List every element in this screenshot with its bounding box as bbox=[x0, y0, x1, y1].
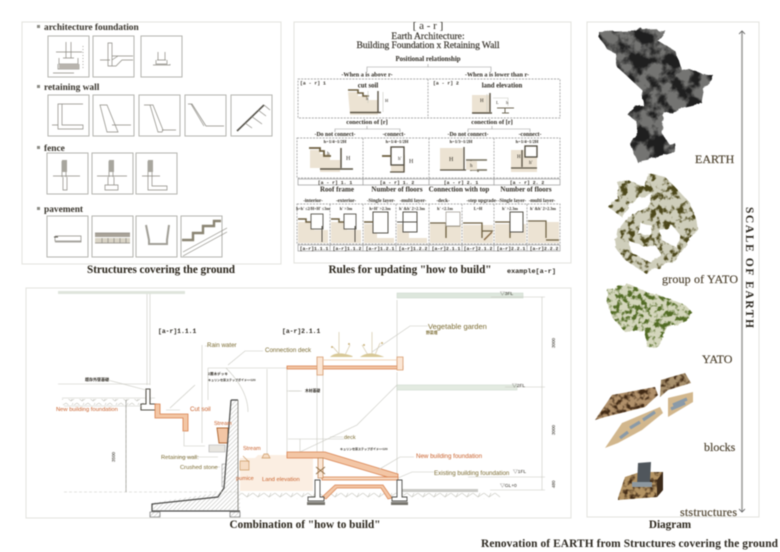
drawing: ground hatch bbox=[240, 493, 500, 499]
labels: connect options: h=1/4~1/2H bbox=[516, 139, 539, 144]
diagram: 1.1: h bbox=[327, 152, 330, 157]
box: level three cases bbox=[296, 204, 560, 244]
level markers and dimensions: ▽3FL bbox=[500, 291, 513, 297]
diagram: cut soil bbox=[348, 90, 389, 115]
callouts: Crushed stone bbox=[180, 465, 218, 471]
thumbnails: retaining wall bbox=[48, 95, 272, 136]
thumbnails: architecture foundation bbox=[48, 36, 182, 77]
callouts: New building foundation bbox=[56, 407, 118, 413]
callouts: deck bbox=[344, 435, 356, 441]
diagram: 2.2: h' bbox=[529, 161, 532, 166]
labels: connect options: -connect- bbox=[383, 132, 405, 138]
level markers and dimensions: 3000 bbox=[551, 424, 556, 435]
callouts: キュリンセ床ステップボイド<=120 bbox=[340, 446, 388, 451]
condition labels: h' >2.3m bbox=[502, 206, 518, 211]
heading: earth architecture: Earth Architecture: bbox=[391, 31, 465, 42]
labels: third level options: -multi layer- bbox=[400, 199, 427, 204]
strip: level three labels bbox=[298, 245, 560, 252]
condition labels: h+H' >2.3m bbox=[369, 206, 391, 211]
diagram: land elevation: L bbox=[496, 100, 499, 105]
box: level one cases bbox=[298, 79, 560, 118]
condition labels bbox=[296, 206, 556, 211]
strip: level two labels bbox=[298, 179, 560, 186]
image: earth map bbox=[599, 30, 713, 163]
callouts: Rain water bbox=[207, 342, 237, 349]
heading: number of floors: Number of floors bbox=[371, 186, 423, 194]
diagram: 2.2: H bbox=[517, 155, 521, 160]
callouts: Connection deck bbox=[265, 347, 312, 354]
heading: earth architecture bbox=[356, 31, 500, 51]
diagram: 1.2: h' bbox=[398, 157, 402, 162]
diagram: 2.2 bbox=[511, 146, 537, 172]
image: group of yato bbox=[608, 173, 698, 273]
panel: combination of how to build bbox=[26, 288, 571, 518]
callouts: Cut soil bbox=[190, 406, 211, 413]
heading: connection with top: Connection with top bbox=[429, 186, 489, 194]
diagram: land elevation: H bbox=[480, 99, 484, 104]
label: group of YATO: group of YATO bbox=[662, 272, 738, 286]
diagram: 2.1: h bbox=[470, 164, 473, 169]
diagram: 1.2: H bbox=[409, 159, 414, 165]
condition labels: h' <2.1m bbox=[437, 206, 453, 211]
labels: connect options: h=1/4~1/2H bbox=[386, 139, 409, 144]
heading: pavement: pavement bbox=[44, 205, 84, 215]
diagram: 2.1 bbox=[440, 147, 487, 172]
labels: connect options: h=1/3~1/2H bbox=[450, 139, 473, 144]
strip: level three labels: [a-r]1.1.1 bbox=[300, 246, 329, 252]
callouts: 2層木デッキ bbox=[208, 371, 228, 376]
drawing: retaining wall bbox=[150, 400, 240, 517]
drawing: footings bbox=[307, 480, 408, 505]
label: EARTH: EARTH bbox=[695, 152, 735, 166]
level markers and dimensions: ▽1FL bbox=[513, 469, 526, 475]
image: blocks bbox=[595, 373, 693, 448]
diagrams: interior and exterior bbox=[298, 214, 361, 243]
diagram: cut soil: h bbox=[366, 96, 369, 101]
strip: level three labels: [a-r]1.2.2 bbox=[399, 246, 428, 252]
labels: third level options bbox=[303, 199, 556, 204]
level markers and dimensions: 480 bbox=[551, 480, 556, 488]
labels: third level options: -exterior- bbox=[336, 199, 356, 204]
diagram: 1.1 bbox=[309, 148, 353, 172]
diagram: 1.1: H bbox=[346, 156, 351, 162]
labels: connect options: -connect- bbox=[519, 132, 541, 138]
label: ststructures: ststructures bbox=[680, 505, 737, 519]
drawing: left building bbox=[58, 291, 185, 410]
dimension: wall height: 3500 bbox=[111, 451, 116, 462]
level markers and dimensions bbox=[468, 291, 556, 490]
labels: connect options: -Do not connect- bbox=[315, 132, 356, 138]
strip: level three labels: [a-r]2.2.1 bbox=[497, 246, 526, 252]
strip: level three labels: [a-r]2.1.2 bbox=[464, 246, 493, 252]
condition labels: h' &h' 2>2.3m bbox=[399, 206, 425, 211]
label: YATO: YATO bbox=[702, 352, 733, 366]
heading: retaining wall: retaining wall bbox=[44, 83, 100, 93]
drawing: new building foundation deck and ramp bbox=[287, 452, 398, 499]
strip: level three labels: [a-r]1.2.1 bbox=[366, 246, 395, 252]
labels: third level options: -step upgrade- bbox=[467, 199, 498, 204]
label: [a-r]2: [a - r] 2 bbox=[433, 80, 459, 86]
label: example: example[a-r] bbox=[507, 268, 556, 276]
thumbnails: pavement bbox=[47, 216, 227, 257]
label: scale of earth: SCALE OF EARTH bbox=[743, 207, 755, 328]
title: combination of how to build: Combination of "how to build" bbox=[230, 519, 380, 531]
heading: cut soil: cut soil bbox=[358, 82, 378, 90]
heading: [a-r]: [ a - r ] bbox=[413, 20, 443, 32]
drawing: orange details near wall bbox=[240, 454, 270, 470]
callouts: 木材基礎 bbox=[305, 388, 320, 393]
strip: level three labels: [a-r]1.1.2 bbox=[333, 246, 362, 252]
title: structures covering the ground: Structures covering the ground bbox=[87, 264, 236, 276]
labels: connect options: -Do not connect- bbox=[448, 132, 489, 138]
callouts: Retaining wall: bbox=[161, 455, 199, 461]
callouts: Vegetable garden bbox=[428, 322, 487, 331]
level markers and dimensions: ▽GL+0 bbox=[500, 483, 517, 489]
image: structure bbox=[618, 462, 663, 500]
labels: third level options: -Single layer- bbox=[367, 199, 395, 204]
title: rules for updating how to build: Rules for updating "how to build" bbox=[328, 264, 492, 276]
label: [a-r]1.1.1: [a-r]1.1.1 bbox=[158, 328, 197, 335]
strip: level two labels: [a - r] 1. 2 bbox=[380, 180, 414, 186]
diagram: land elevation: h bbox=[506, 100, 509, 105]
label: blocks: blocks bbox=[704, 440, 736, 454]
label: when a is above r: -When a is above r- bbox=[341, 72, 393, 78]
labels: third level options: -multi layer- bbox=[529, 199, 556, 204]
box: level two cases bbox=[297, 138, 560, 178]
level markers and dimensions: ▽2FL bbox=[512, 383, 525, 389]
heading: land elevation: land elevation bbox=[482, 82, 523, 90]
strip: level three labels: [a-r]2.1.1 bbox=[432, 246, 461, 252]
tree connector bbox=[367, 64, 491, 72]
labels: connect options bbox=[315, 132, 541, 144]
panel: structures covering the ground bbox=[22, 22, 281, 276]
callouts bbox=[56, 322, 510, 483]
label: positional relationship: Positional relationship bbox=[395, 56, 461, 63]
leader lines bbox=[104, 326, 434, 478]
tree connectors second level bbox=[335, 126, 530, 132]
callouts: 野菜畑 bbox=[426, 330, 438, 335]
heading: fence: fence bbox=[44, 144, 65, 154]
callouts: New building foundation bbox=[416, 453, 483, 460]
callouts: キュリンセ床ステップボイド<=120 bbox=[208, 377, 256, 382]
label: connection of r (right): conection of [r] bbox=[471, 119, 513, 126]
diagram: land elevation bbox=[472, 93, 514, 113]
diagram: cut soil: H bbox=[385, 98, 389, 103]
label: connection of r (left): conection of [r] bbox=[346, 119, 388, 126]
drawing: vegetable planter deck bbox=[287, 332, 403, 375]
condition labels: h+h' ≤2/H+H' ≤3m bbox=[296, 206, 330, 211]
callouts: Stream bbox=[243, 446, 261, 452]
heading: earth architecture: Building Foundation x Retaining Wall bbox=[356, 40, 500, 51]
heading: number of floors (2): Number of floors bbox=[500, 186, 552, 194]
callouts: 既存外壁基礎 bbox=[85, 376, 109, 382]
drawing: right building frame bbox=[287, 290, 523, 492]
title: diagram: Diagram bbox=[649, 519, 692, 531]
caption: renovation of earth: Renovation of EARTH from Structures covering the ground bbox=[481, 538, 779, 550]
diagram: 1.2 bbox=[382, 147, 414, 172]
callouts: Stream bbox=[214, 421, 232, 427]
strip: level two labels: [a - r] 1. 1 bbox=[318, 180, 352, 186]
diagrams: single and multi layer (2) bbox=[495, 212, 559, 243]
thumbnails: fence bbox=[47, 153, 177, 194]
label: [a-r]1: [a - r] 1 bbox=[300, 80, 326, 86]
labels: third level options: -deck- bbox=[436, 199, 450, 204]
labels: third level options: -interior- bbox=[303, 199, 323, 204]
callouts: Existing building foundation bbox=[434, 470, 510, 477]
labels: third level options: -Single layer- bbox=[498, 199, 526, 204]
arrow: scale bbox=[739, 31, 745, 512]
panel: diagram bbox=[587, 22, 759, 519]
diagram: 2.1: H bbox=[449, 157, 454, 163]
callouts: Land elevation bbox=[262, 477, 300, 483]
strip: level three labels: [a-r]2.2.2 bbox=[530, 246, 559, 252]
strip: level two labels: [a - r] 2. 2 bbox=[510, 180, 544, 186]
level markers and dimensions: 3000 bbox=[551, 337, 556, 348]
diagrams: deck and step upgrade bbox=[430, 212, 493, 243]
panel: rules for updating how to build bbox=[294, 20, 571, 263]
dimension: wall height bbox=[64, 400, 240, 492]
drawing: stepped cut soil bbox=[155, 345, 229, 487]
land elevation block bbox=[240, 455, 313, 491]
heading: roof frame: Roof frame bbox=[320, 186, 354, 194]
condition labels: h' >3m bbox=[340, 206, 353, 211]
label: when a is lower than r: -When a is lower than r- bbox=[465, 72, 529, 78]
condition labels: L=H bbox=[474, 206, 483, 211]
callouts: pumice bbox=[236, 476, 254, 482]
diagrams: single and multi layer bbox=[364, 212, 427, 243]
image: yato bbox=[607, 284, 693, 348]
label: [a-r]2.1.1: [a-r]2.1.1 bbox=[282, 328, 321, 335]
labels: connect options: h=1/4~1/2H bbox=[324, 139, 347, 144]
strip: level two labels: [a - r] 2. 1 bbox=[444, 180, 478, 186]
drawing: connection deck lines bbox=[208, 368, 287, 460]
condition labels: h' &h' 2>2.3m bbox=[530, 206, 556, 211]
heading: architecture foundation: architecture foundation bbox=[44, 23, 139, 33]
